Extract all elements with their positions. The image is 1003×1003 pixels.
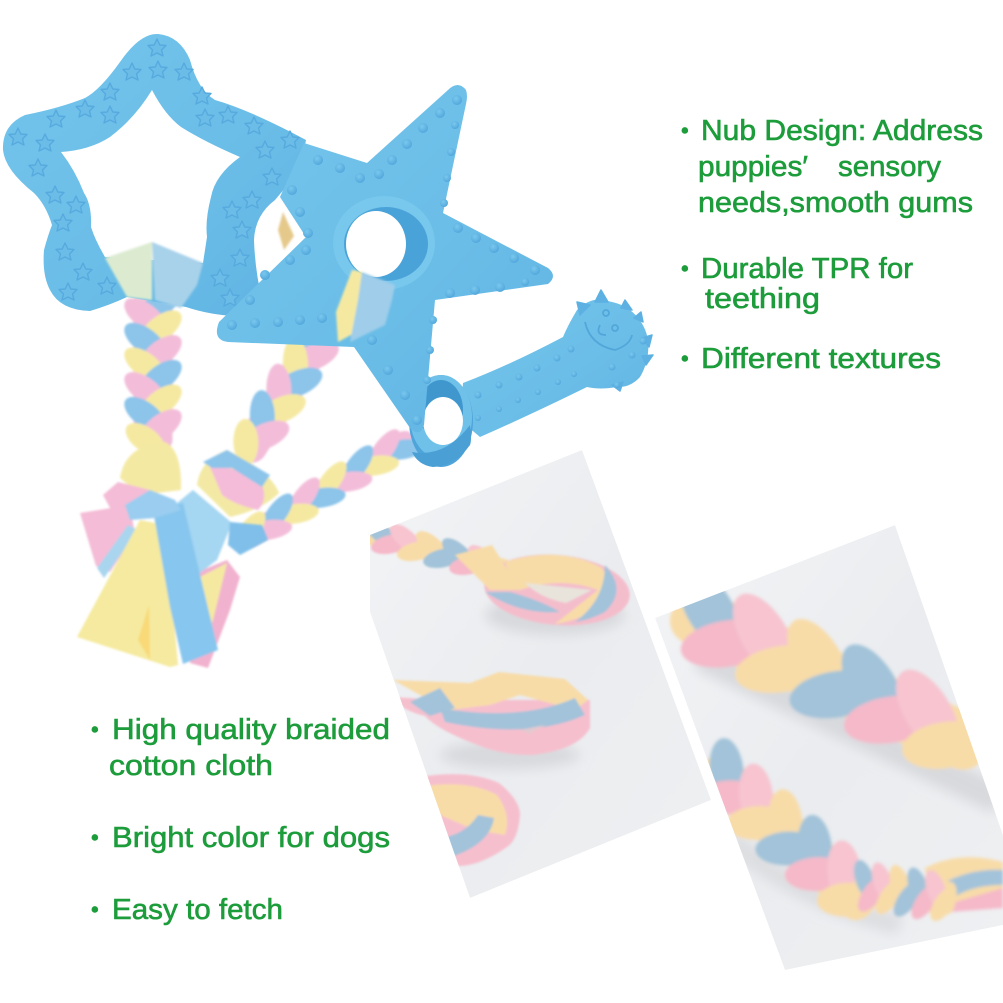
- photo panel: braided rope loops: [350, 450, 711, 898]
- bullet: easy to fetch: •: [91, 897, 99, 922]
- bullet: durable: •: [681, 256, 689, 281]
- photo rope: upper braid: [668, 590, 994, 812]
- photo rope: top loop: [370, 524, 631, 636]
- feature: nub design line 3: needs,smooth gums: [698, 187, 973, 219]
- text: rope features: [91, 714, 390, 926]
- bone spikes: [577, 290, 653, 391]
- toy: hollow star with star pattern: [3, 34, 306, 316]
- feature: braided cotton line 1: High quality braided: [112, 714, 390, 746]
- feature: nub design line 2b: sensory: [838, 151, 942, 183]
- bullet: nub design: •: [681, 118, 689, 143]
- feature: easy to fetch: Easy to fetch: [112, 894, 283, 926]
- feature: durable line 2: teething: [705, 283, 820, 315]
- feature: nub design line 1: Nub Design: Address: [701, 115, 983, 147]
- cloth wrap on star: [336, 270, 395, 342]
- feature: nub design line 2a: puppies′: [698, 151, 808, 183]
- bone ring: [409, 375, 473, 467]
- feature: braided cotton line 2: cotton cloth: [109, 750, 273, 782]
- rope tassel knot: [77, 442, 279, 668]
- toy rope: left braid: [116, 280, 190, 461]
- feature: bright color: Bright color for dogs: [112, 822, 390, 854]
- feature: textures: Different textures: [701, 343, 941, 375]
- bone nubs: [474, 338, 646, 421]
- feature: durable line 1: Durable TPR for: [701, 253, 913, 285]
- star nubs: [227, 95, 540, 425]
- photo rope: bottom loop: [425, 774, 520, 866]
- photo rope: lower braid: [707, 736, 1003, 932]
- cloth wrap on hollow star: [105, 242, 203, 308]
- photo rope: middle loop: [393, 672, 590, 769]
- toy: star with nubs: [217, 85, 553, 432]
- hint of cloth behind stars: [278, 212, 294, 250]
- bone face: [585, 310, 632, 350]
- toy rope: middle braid: [211, 259, 384, 485]
- star centre ring: [333, 196, 435, 290]
- bullet: textures: •: [681, 346, 689, 371]
- toy: bone teether with ring: [409, 290, 653, 467]
- text: toy features: [681, 115, 983, 375]
- toy rope: right braid: [218, 411, 436, 567]
- photo panel: braid close-up: [633, 525, 1003, 970]
- bullet: bright color: •: [91, 825, 99, 850]
- star pattern: [9, 39, 299, 306]
- bullet: braided cotton: •: [91, 717, 99, 742]
